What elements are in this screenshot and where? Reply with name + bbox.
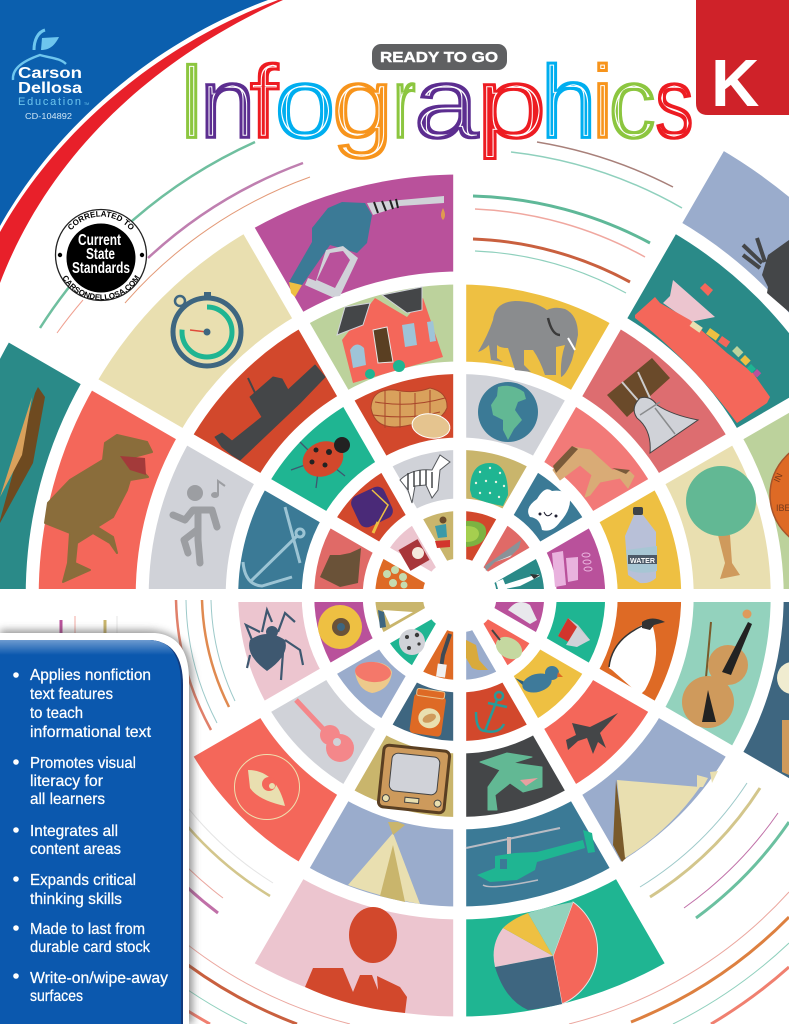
panel: feature list: [0, 633, 189, 1024]
cell: tipi: [323, 822, 460, 904]
cell: coin: IN: [772, 471, 785, 484]
publisher logo: CD-104892: [25, 111, 72, 121]
cell: crocodile: [460, 753, 555, 810]
cell: globe: [460, 382, 555, 442]
cell: cactus: [460, 463, 520, 506]
cell: speech: [697, 184, 789, 358]
bullet: nonfiction: to teach: [30, 705, 83, 722]
cell: sailboat: [378, 596, 413, 628]
cell: liberty bell: [596, 358, 698, 459]
title: g: [331, 46, 394, 160]
bullet: write-on: Write-on/wipe-away: [30, 970, 168, 987]
bullet: critical thinking: thinking skills: [30, 891, 122, 908]
bullet: nonfiction: [13, 667, 152, 741]
panel shadow: [0, 630, 193, 1024]
bullet: content areas: content areas: [30, 841, 121, 858]
cell: lizard: [460, 640, 490, 670]
bullet: write-on: [13, 970, 168, 1005]
cell: tree: [686, 459, 756, 596]
title: o: [274, 45, 336, 160]
bullet: card stock: durable card stock: [30, 939, 151, 956]
standards badge: State: [86, 246, 115, 263]
cell: water bottle: WATER: [630, 556, 656, 565]
cell: peanut butter jar: [399, 688, 460, 737]
cell: cargo ship: [635, 273, 782, 423]
cell: jet: [555, 690, 624, 760]
bullet: nonfiction: informational text: [30, 724, 152, 741]
title: c: [608, 45, 656, 160]
decorative arcs: bottom right: [569, 783, 789, 1024]
bullet: write-on: surfaces: [30, 988, 83, 1005]
decorative arcs: top right: [473, 142, 682, 293]
cell: dinosaur: [45, 409, 152, 596]
standards badge: Standards: [72, 260, 130, 277]
bullet: content areas: [13, 823, 121, 858]
series pill: ready to go: [372, 44, 507, 70]
series pill: ready to go: READY TO GO: [380, 49, 498, 66]
cell: moon: [399, 626, 429, 655]
title: h: [540, 44, 597, 160]
bullet: visual literacy: Promotes visual: [30, 755, 136, 772]
cell: sunflower: [318, 596, 362, 656]
cell: penguin: [609, 596, 665, 695]
cell: soda can: [398, 539, 430, 571]
standards badge: [54, 208, 148, 302]
title: f: [249, 45, 279, 161]
cell: pie chart: [460, 902, 646, 1010]
cell: avocado: [460, 521, 490, 547]
cell: horse: [553, 431, 634, 501]
cell: water bottle: [624, 501, 657, 596]
cell: barn: [558, 596, 590, 656]
cell: ice cream: [777, 596, 789, 782]
publisher logo: [13, 30, 89, 121]
title: [178, 41, 694, 162]
cell: spider: [246, 596, 303, 690]
cell: birthday cake: [552, 535, 592, 596]
standards badge: CORRELATED TO: [68, 211, 134, 230]
cell: peanut: [365, 388, 460, 441]
standards badge: CARSONDELLOSA.COM: [63, 275, 140, 300]
cell: canoe: [0, 358, 48, 596]
title: I: [178, 41, 206, 162]
cell: grapes: [383, 565, 408, 596]
cell: elephant: [460, 301, 596, 377]
cell: grapefruit: [354, 656, 399, 701]
cell: gas pump: [273, 196, 460, 297]
cell: dancer: [173, 459, 225, 596]
title: p: [476, 46, 547, 160]
title: a: [413, 47, 480, 160]
cell: boot: [320, 535, 361, 596]
cell: anchor outline: [243, 501, 304, 596]
bullet: card stock: [13, 921, 151, 956]
cell: toothbrush: [429, 634, 460, 678]
grade tab: [696, 0, 789, 121]
cell: shark: [485, 540, 521, 571]
cell: house: [323, 287, 460, 383]
cell: space shuttle: [496, 565, 540, 596]
cell: violin: [682, 596, 752, 732]
publisher corner: red swoosh: [0, 0, 283, 283]
title: i: [591, 44, 614, 160]
cell: pear: [490, 626, 526, 664]
decorative arcs: top left: [40, 142, 310, 333]
publisher logo: TM: [84, 102, 89, 106]
cell: ladybug: [291, 431, 365, 501]
cell: television: [365, 745, 460, 813]
cell: stopwatch: [137, 273, 273, 409]
cell: anchor: [460, 692, 520, 732]
cell: tooth: [520, 489, 570, 535]
bullet: nonfiction: Applies nonfiction: [30, 667, 151, 684]
cell: coin: [770, 409, 789, 596]
publisher logo: Dellosa: [18, 80, 82, 97]
icon: apple: [13, 30, 66, 80]
cell: zebra: [399, 455, 460, 503]
cell: pyramid: [596, 732, 718, 862]
title: r: [392, 45, 416, 160]
cell: helicopter: [460, 828, 596, 887]
bullet: visual literacy: literacy for: [30, 773, 104, 790]
bullet: critical thinking: Expands critical: [30, 872, 136, 889]
bullet: visual literacy: all learners: [30, 791, 105, 808]
cell: eye: [224, 732, 323, 831]
title: s: [655, 47, 694, 160]
cell: businessman: [273, 907, 460, 1013]
decorative arcs: bottom left: [61, 600, 350, 1024]
standards badge: Current: [78, 232, 122, 249]
title: n: [199, 46, 256, 160]
cell: igloo: [508, 596, 537, 626]
bullet: visual literacy: [13, 755, 136, 808]
publisher logo: Education: [18, 96, 81, 108]
publisher corner: blue field: [0, 0, 268, 226]
cell: submarine: [215, 360, 325, 460]
grade tab: K: [711, 46, 759, 121]
bullet: card stock: Made to last from: [30, 921, 145, 938]
bullet: content areas: Integrates all: [30, 823, 118, 840]
cell: backpack: [349, 484, 399, 535]
bullet: nonfiction: text features: [30, 686, 113, 703]
bullet: critical thinking: [13, 872, 136, 908]
cell: runner: [429, 516, 460, 548]
publisher logo: Carson: [18, 65, 82, 82]
cell: bird: [515, 656, 565, 701]
cell: guitar: [295, 690, 365, 762]
